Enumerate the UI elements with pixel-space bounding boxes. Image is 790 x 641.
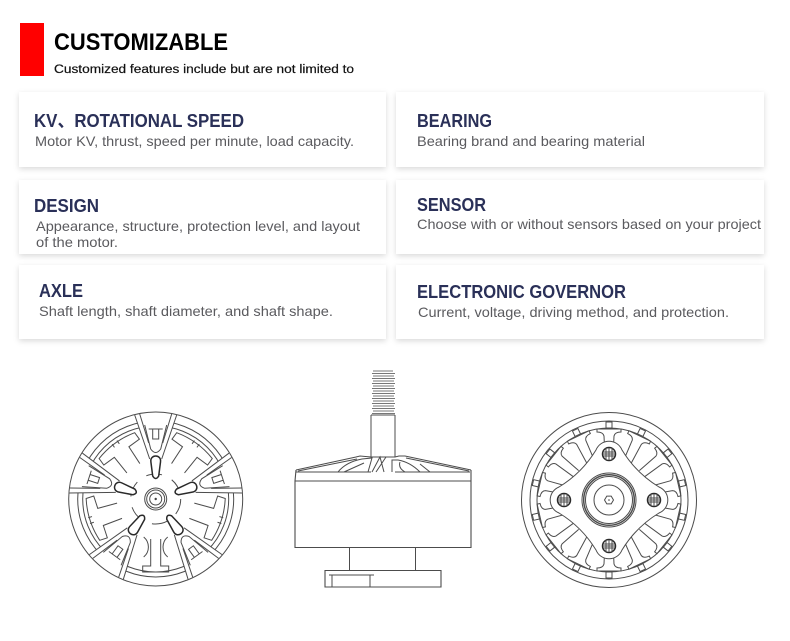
subtitle: Customized features include but are not limited to: [54, 64, 354, 76]
heading: axle: AXLE: [39, 281, 83, 301]
heading: sensor: SENSOR: [417, 195, 486, 215]
mounting plate: [550, 441, 668, 559]
heading: bearing: BEARING: [417, 111, 492, 131]
base: [325, 570, 441, 587]
accent: red block: [20, 23, 44, 76]
text: design description: Appearance, structure, protection level, and layout: [36, 218, 360, 234]
bell: [296, 456, 471, 472]
motor body: [295, 470, 471, 548]
text: KV description: Motor KV, thrust, speed per minute, load capacity.: [35, 133, 354, 149]
centre bearing: [582, 473, 636, 527]
text: bearing description: Bearing brand and bearing material: [417, 133, 645, 149]
heading: electronic governor: ELECTRONIC GOVERNOR: [417, 282, 626, 302]
text: design description: [36, 218, 360, 250]
panel: axle: [19, 265, 386, 339]
neck: [350, 548, 416, 570]
text: sensor description: Choose with or without sensors based on your project: [417, 216, 761, 232]
heading: design: DESIGN: [34, 196, 99, 216]
heading: KV: KV、ROTATIONAL SPEED: [34, 111, 244, 131]
panel: sensor: [396, 180, 764, 254]
mounting holes: [558, 448, 660, 552]
smooth shaft: [371, 415, 395, 457]
title: CUSTOMIZABLE: [54, 29, 228, 56]
panel: design: [19, 180, 386, 254]
motor drawing: side view: [295, 371, 471, 587]
panel: electronic governor: [396, 265, 764, 339]
text: axle description: Shaft length, shaft diameter, and shaft shape.: [39, 303, 333, 319]
threaded shaft: [372, 371, 395, 414]
text: electronic governor description: Current, voltage, driving method, and protection.: [418, 304, 729, 320]
motor drawing: bottom view: [522, 412, 696, 588]
text: design description: of the motor.: [36, 234, 118, 250]
panel: bearing: [396, 92, 764, 167]
panel: KV, rotational speed: [19, 92, 386, 167]
motor drawing: top view: [68, 412, 243, 586]
